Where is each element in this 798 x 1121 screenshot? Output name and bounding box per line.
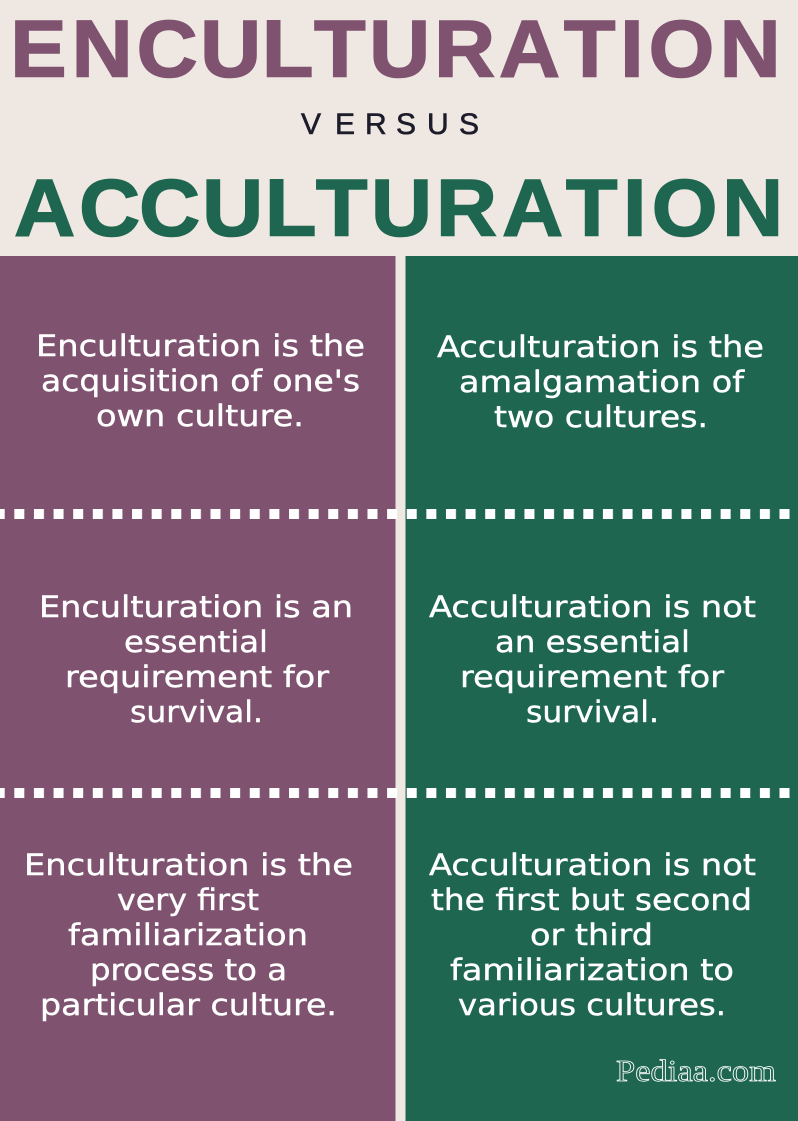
text: enculturation point 2 — [39, 590, 353, 729]
text: enculturation point 1 — [36, 329, 365, 433]
text: acculturation point 2: requirement for — [460, 660, 725, 694]
text: enculturation point 3: very first — [117, 883, 259, 917]
text: enculturation point 3: Enculturation is the — [24, 848, 353, 882]
logo: Pediaa.com: Pediaa.com — [616, 1053, 776, 1088]
text: acculturation point 1: Acculturation is the — [437, 330, 764, 364]
text: acculturation point 3: familiarization to — [450, 953, 734, 987]
title: acculturation: ACCULTURATION — [14, 163, 783, 253]
text: enculturation point 2: requirement for — [65, 660, 330, 694]
text: enculturation point 2: essential — [124, 625, 268, 659]
panel: acculturation column — [406, 256, 798, 1121]
text: enculturation point 1: acquisition of one's — [41, 364, 360, 398]
text: enculturation point 2: Enculturation is an — [39, 590, 353, 624]
text: acculturation point 2: survival. — [526, 695, 659, 729]
text: acculturation point 1 — [437, 330, 764, 434]
text: enculturation point 1: own culture. — [96, 399, 304, 433]
text: acculturation point 2: an essential — [495, 625, 690, 659]
text: enculturation point 2: survival. — [130, 695, 263, 729]
title: enculturation: ENCULTURATION — [10, 4, 781, 94]
text: acculturation point 2: Acculturation is not — [429, 590, 756, 624]
text: enculturation point 3 — [24, 848, 353, 1022]
text: acculturation point 3: Acculturation is not — [429, 848, 756, 882]
text: acculturation point 3: various cultures. — [458, 988, 726, 1022]
panel: enculturation column — [0, 256, 396, 1121]
subtitle: versus: VERSUS — [301, 108, 479, 141]
text: acculturation point 1: amalgamation of — [459, 365, 745, 399]
text: acculturation point 3: the first but second — [431, 883, 752, 917]
text: enculturation point 1: Enculturation is the — [36, 329, 365, 363]
text: acculturation point 2 — [429, 590, 756, 729]
text: enculturation point 3: familiarization — [68, 918, 308, 952]
text: enculturation point 3: process to a — [90, 953, 287, 987]
text: enculturation point 3: particular culture. — [40, 988, 337, 1022]
text: acculturation point 3 — [429, 848, 756, 1022]
text: acculturation point 1: two cultures. — [494, 400, 708, 434]
text: acculturation point 3: or third — [530, 918, 653, 952]
